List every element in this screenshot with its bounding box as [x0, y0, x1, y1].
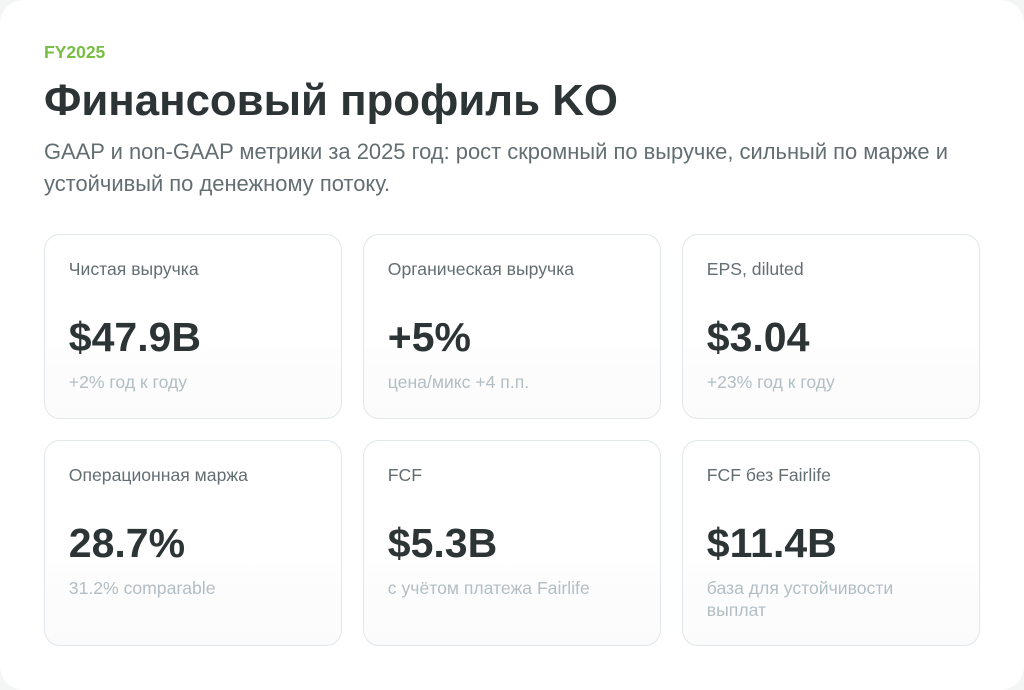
title: Финансовый профиль KO [44, 76, 618, 125]
label: FCF [388, 465, 422, 485]
value: $11.4B [707, 520, 837, 566]
note: выплат [707, 600, 766, 620]
note [707, 578, 893, 620]
note: +23% год к году [707, 372, 835, 392]
note: 31.2% comparable [69, 578, 216, 598]
value: $47.9B [69, 314, 201, 360]
note: с учётом платежа Fairlife [388, 578, 590, 598]
note: +2% год к году [69, 372, 187, 392]
card: operating margin [44, 440, 342, 646]
card: FCF excluding Fairlife [682, 440, 980, 646]
label: EPS, diluted [707, 259, 804, 279]
note: цена/микс +4 п.п. [388, 372, 529, 392]
note: база для устойчивости [707, 578, 893, 598]
label: Операционная маржа [69, 465, 248, 485]
subtitle [44, 139, 948, 196]
card: net revenue [44, 234, 342, 419]
value: $3.04 [707, 314, 809, 360]
value: $5.3B [388, 520, 497, 566]
subtitle: устойчивый по денежному потоку. [44, 171, 390, 196]
value: +5% [388, 314, 471, 360]
label: Органическая выручка [388, 259, 574, 279]
card: FCF [363, 440, 661, 646]
subtitle: GAAP и non-GAAP метрики за 2025 год: рост скромный по выручке, сильный по марже и [44, 139, 948, 164]
label: FCF без Fairlife [707, 465, 831, 485]
eyebrow: fiscal year: FY2025 [44, 42, 105, 62]
label: Чистая выручка [69, 259, 199, 279]
card: organic revenue [363, 234, 661, 419]
value: 28.7% [69, 520, 185, 566]
card: diluted EPS [682, 234, 980, 419]
